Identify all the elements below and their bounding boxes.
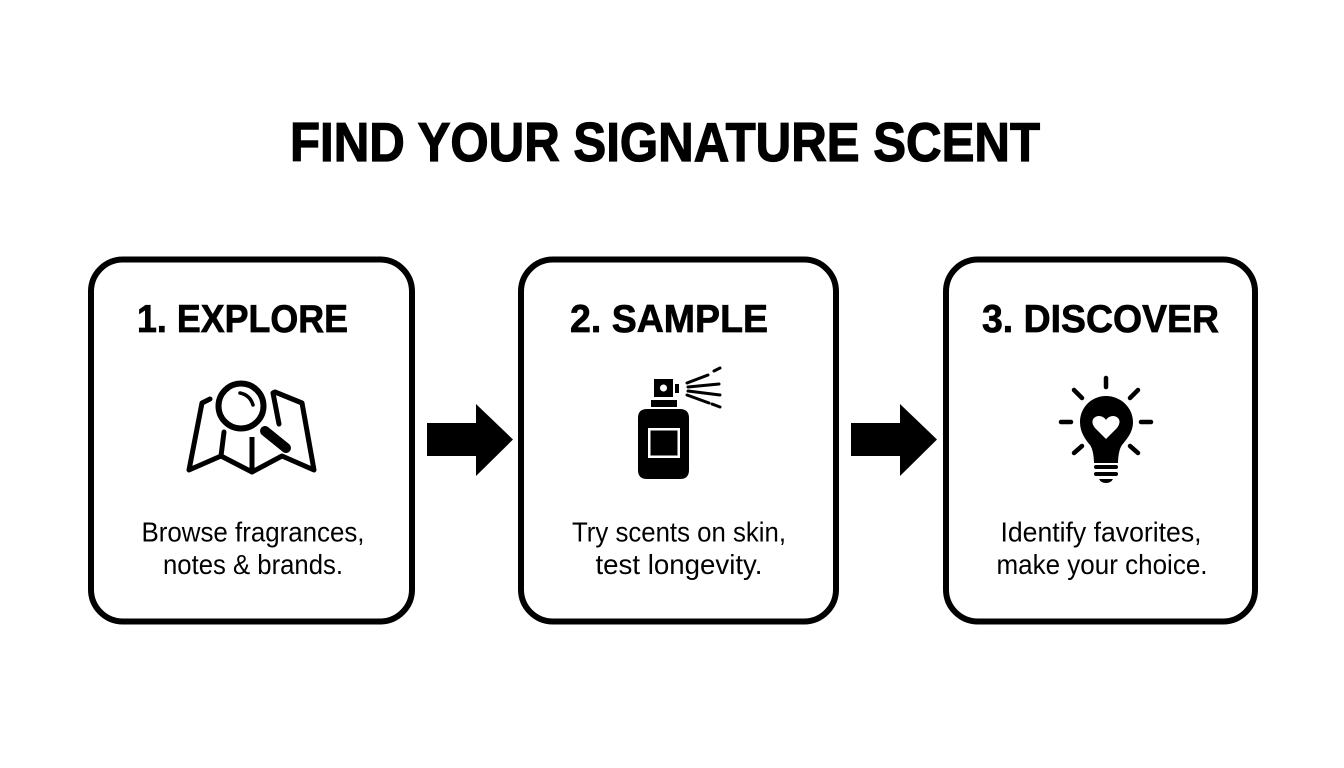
- description: sample: Try scents on skin,: [572, 516, 786, 548]
- panel: discover: [946, 260, 1255, 622]
- description: discover: make your choice.: [996, 549, 1208, 580]
- heading: sample: 2. SAMPLE: [570, 298, 768, 341]
- panel: sample: [521, 260, 836, 622]
- arrow: explore to sample: [427, 404, 513, 476]
- arrow: sample to discover: [851, 404, 937, 476]
- icon: perfume spray bottle: [638, 368, 720, 479]
- description: explore: notes & brands.: [163, 549, 343, 580]
- description: discover: Identify favorites,: [1000, 516, 1202, 548]
- description: explore: [142, 516, 364, 580]
- description: discover: [996, 516, 1208, 580]
- panel: explore: [91, 260, 412, 622]
- icon: map with magnifying glass: [189, 384, 314, 472]
- description: sample: test longevity.: [596, 549, 762, 580]
- heading: discover: 3. DISCOVER: [982, 298, 1219, 341]
- heading: explore: 1. EXPLORE: [137, 298, 348, 341]
- description: explore: Browse fragrances,: [142, 516, 364, 548]
- icon: light bulb with heart: [1061, 378, 1151, 483]
- description: sample: [572, 516, 786, 580]
- title: FIND YOUR SIGNATURE SCENT: [290, 111, 1040, 173]
